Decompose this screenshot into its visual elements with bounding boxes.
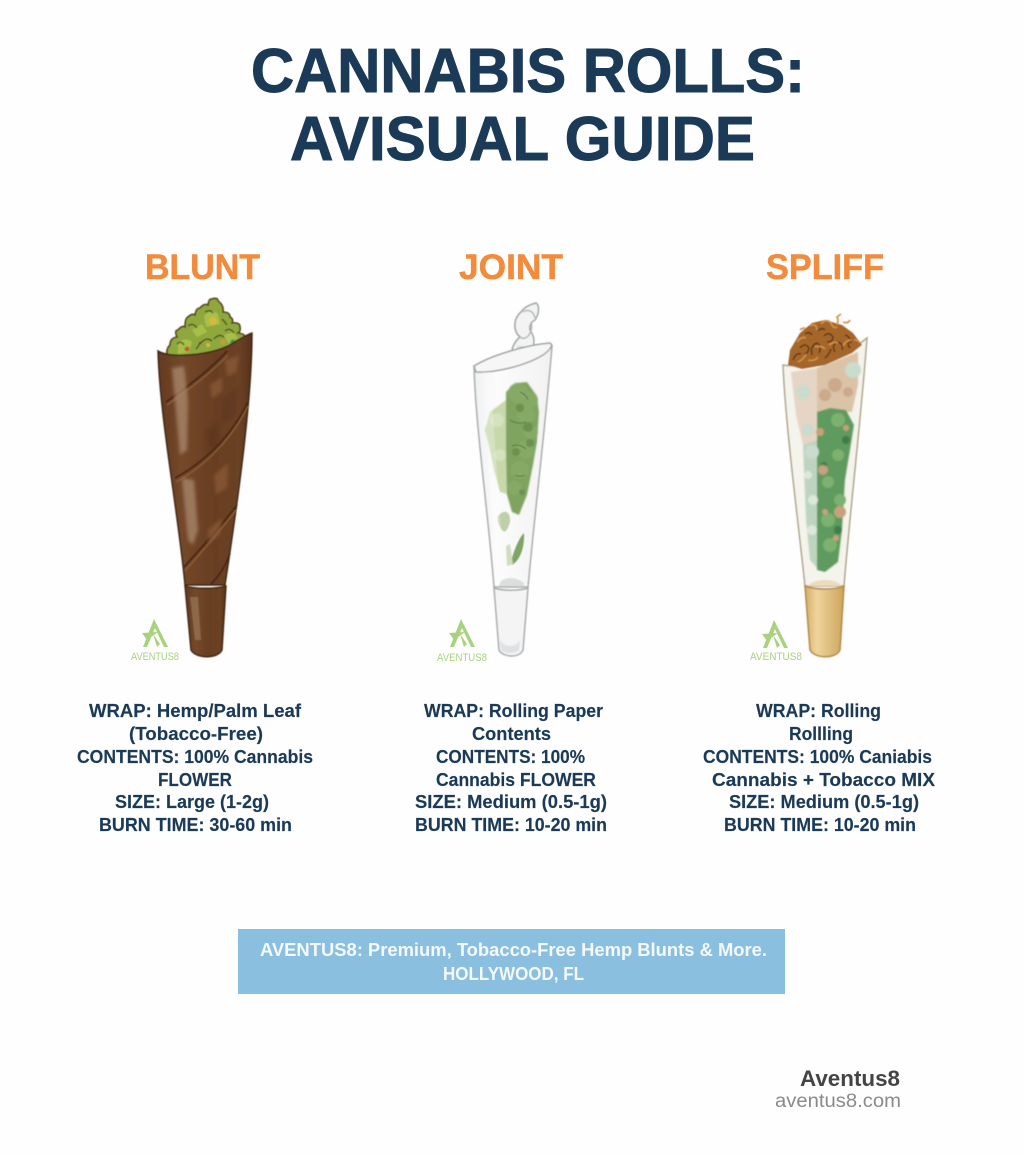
text block: joint details [415, 701, 607, 835]
tobacco top [788, 320, 862, 369]
text block: spliff details: SIZE: Medium (0.5-1g) [729, 792, 919, 812]
paper cone [474, 346, 552, 587]
footer brand [775, 1066, 901, 1112]
text block: spliff details: CONTENTS: 100% Caniabis [703, 747, 932, 767]
text block: spliff details [703, 701, 935, 835]
cannabis flower top [167, 298, 245, 358]
text block: joint details: BURN TIME: 10-20 min [415, 815, 607, 835]
brown wrap [158, 333, 252, 585]
cannabis flower inside [482, 372, 539, 588]
banner: HOLLYWOOD, FL [443, 964, 584, 984]
text block: blunt details: (Tobacco-Free) [129, 724, 263, 744]
banner: AVENTUS8: Premium, Tobacco-Free Hemp Blunts & More. [260, 940, 767, 960]
cannabis and tobacco mix [791, 352, 861, 590]
heading: spliff: SPLIFF [766, 248, 884, 287]
text block: spliff details: Cannabis + Tobacco MIX [712, 770, 935, 790]
heading: blunt: BLUNT [145, 248, 260, 287]
heading: joint: JOINT [459, 248, 563, 287]
text block: spliff details: BURN TIME: 10-20 min [724, 815, 916, 835]
text block: blunt details: WRAP: Hemp/Palm Leaf [89, 701, 302, 721]
filter [805, 586, 844, 657]
text block: blunt details: SIZE: Large (1-2g) [115, 792, 269, 812]
illustration: joint [474, 303, 552, 656]
title: AVISUAL GUIDE [290, 105, 755, 174]
illustration: spliff [783, 314, 867, 657]
logo: spliff [750, 620, 802, 663]
footer brand: aventus8.com [775, 1091, 901, 1112]
wrap folds [166, 351, 248, 584]
text block: joint details: Contents [472, 724, 551, 744]
filter [185, 586, 226, 657]
text block: blunt details: BURN TIME: 30-60 min [99, 815, 292, 835]
logo: joint [437, 619, 487, 664]
logo: spliff: AVENTUS8 [750, 651, 802, 663]
title: CANNABIS ROLLS: [251, 37, 805, 106]
logo: blunt [131, 619, 179, 663]
text block: spliff details: WRAP: Rolling [756, 701, 881, 721]
text block: spliff details: Rollling [789, 724, 853, 744]
logo: joint: AVENTUS8 [437, 652, 487, 664]
text block: joint details: Cannabis FLOWER [436, 770, 596, 790]
footer brand: Aventus8 [800, 1066, 900, 1091]
filter [494, 588, 528, 656]
text block: blunt details [77, 701, 313, 835]
paper cone [783, 338, 867, 586]
illustration: blunt [158, 298, 252, 657]
text block: joint details: WRAP: Rolling Paper [424, 701, 603, 721]
text block: joint details: SIZE: Medium (0.5-1g) [415, 792, 607, 812]
paper twist [512, 303, 539, 365]
text block: blunt details: FLOWER [158, 770, 232, 790]
logo: blunt: AVENTUS8 [131, 651, 179, 663]
title [251, 37, 805, 174]
banner [238, 929, 785, 994]
text block: joint details: CONTENTS: 100% [436, 747, 585, 767]
text block: blunt details: CONTENTS: 100% Cannabis [77, 747, 313, 767]
